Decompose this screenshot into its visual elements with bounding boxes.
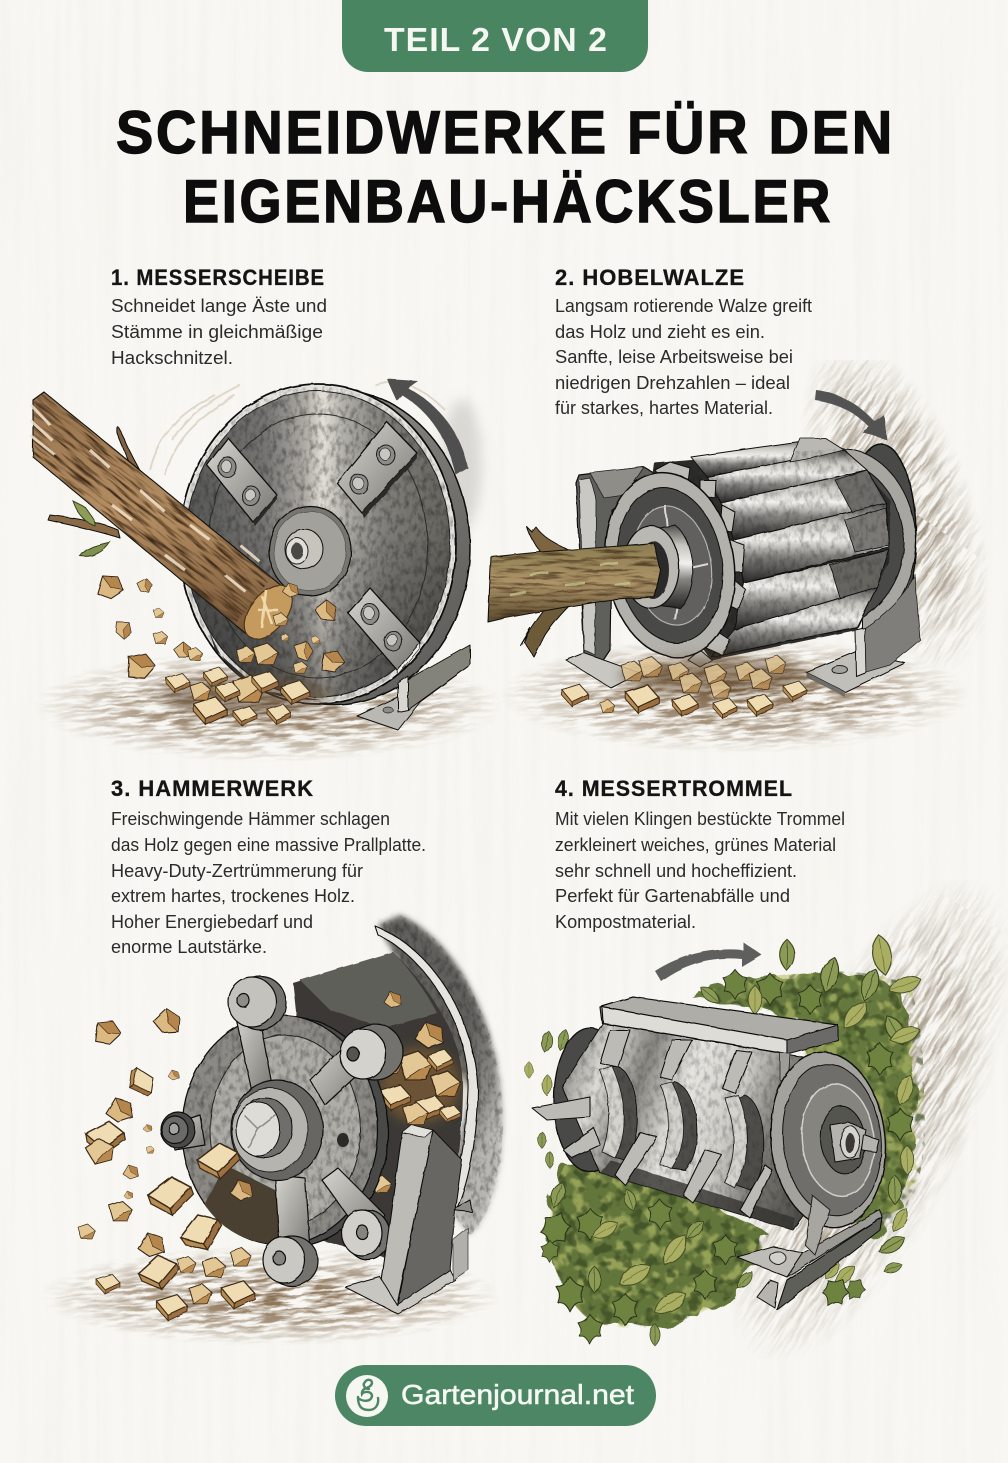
illustration: planer roller pulling a log [486, 360, 985, 752]
wood chips [93, 572, 347, 726]
text block: Messerscheibe description: Stämme in gleichmäßige [111, 321, 323, 342]
panel: 1 Messerscheibe [29, 269, 493, 760]
text block: Messertrommel description [555, 808, 845, 932]
log [29, 391, 293, 640]
footer badge: Gartenjournal.net [335, 1365, 656, 1426]
text block: Messerscheibe description [111, 295, 327, 368]
backdrop streaks [737, 888, 1007, 1352]
heading: Hammerwerk: 3. HAMMERWERK [111, 776, 314, 801]
front flange [592, 462, 748, 667]
top crossbar [600, 997, 838, 1085]
text block: Hammerwerk description: extrem hartes, trockenes Holz. [111, 885, 355, 906]
end disc [762, 1047, 894, 1233]
rotation arrow [655, 942, 762, 981]
heading: Hobelwalze: 2. HOBELWALZE [555, 265, 745, 290]
rotor hub [231, 1080, 323, 1180]
text block: Messertrommel description: Perfekt für Gartenabfälle und [555, 885, 790, 906]
text block: Hobelwalze description [555, 295, 812, 418]
ground streaks [50, 1249, 492, 1344]
illustration: knife drum shredding green waste [525, 880, 1008, 1360]
text block: Hobelwalze description: das Holz und zieht es ein. [555, 321, 765, 342]
title [116, 99, 895, 235]
badge: part indicator [342, 0, 648, 72]
support post [345, 1125, 468, 1314]
text block: Hammerwerk description [111, 808, 426, 957]
knife disc [180, 384, 470, 705]
heading: Messerscheibe: 1. MESSERSCHEIBE [111, 265, 325, 290]
wood chips [562, 655, 810, 718]
text block: Hobelwalze description: niedrigen Drehzahlen – ideal [555, 372, 790, 393]
illustration: hammer mill shattering wood [50, 912, 506, 1344]
knife plates [207, 422, 420, 674]
text block: Messerscheibe description: Schneidet lange Äste und [111, 295, 327, 316]
hammer rotor disc [180, 1015, 388, 1250]
hub [269, 506, 351, 596]
text block: Messerscheibe description: Hackschnitzel. [111, 347, 233, 368]
flying wood chips [78, 1006, 255, 1321]
text block: Messertrommel description: Mit vielen Klingen bestückte Trommel [555, 808, 845, 829]
drum blades [532, 1030, 772, 1218]
backdrop and ground streaks [508, 360, 985, 752]
text block: Hammerwerk description: das Holz gegen eine massive Prallplatte. [111, 834, 426, 855]
drum body [552, 1024, 804, 1230]
panel: 4 Messertrommel [525, 776, 1008, 1360]
panel: 2 Hobelwalze [486, 269, 985, 752]
badge: part indicator: TEIL 2 VON 2 [384, 21, 608, 58]
text block: Messertrommel description: zerkleinert weiches, grünes Material [555, 834, 836, 855]
illustration: knife disc cutting a log [29, 378, 493, 760]
rear frame [566, 467, 654, 688]
rotation arrow [387, 379, 468, 475]
title: SCHNEIDWERKE FÜR DEN [116, 99, 895, 166]
leaf mass behind the drum [680, 933, 930, 1311]
text block: Messertrommel description: Kompostmaterial. [555, 911, 696, 932]
heading: Messertrommel: 4. MESSERTROMMEL [555, 776, 793, 801]
base frame [737, 1195, 882, 1310]
hub collar [623, 525, 693, 608]
roller drum [640, 438, 916, 665]
interior chip pile [372, 992, 461, 1192]
text block: Hobelwalze description: für starkes, hartes Material. [555, 397, 773, 418]
rotation arrow [815, 390, 887, 440]
text block: Hobelwalze description: Langsam rotierende Walze greift [555, 295, 812, 316]
shredded leaves [525, 1028, 869, 1346]
text block: Hammerwerk description: Heavy-Duty-Zertrümmerung für [111, 860, 363, 881]
text block: Hammerwerk description: Freischwingende Hämmer schlagen [111, 808, 390, 829]
log [480, 527, 670, 657]
text block: Hobelwalze description: Sanfte, leise Arbeitsweise bei [555, 346, 793, 367]
text block: Messertrommel description: sehr schnell und hocheffizient. [555, 860, 797, 881]
text block: Hammerwerk description: enorme Lautstärke. [111, 936, 267, 957]
ground streaks [44, 656, 493, 760]
swinging hammers [161, 976, 403, 1286]
panel: 3 Hammerwerk [50, 780, 506, 1344]
base bracket [806, 575, 920, 697]
text block: Hammerwerk description: Hoher Energiebedarf und [111, 911, 313, 932]
title: EIGENBAU-HÄCKSLER [183, 168, 833, 235]
icon: plant logo [346, 1375, 388, 1417]
base bracket [357, 645, 470, 730]
footer badge: Gartenjournal.net: Gartenjournal.net [401, 1379, 634, 1410]
housing shell [293, 912, 510, 1270]
